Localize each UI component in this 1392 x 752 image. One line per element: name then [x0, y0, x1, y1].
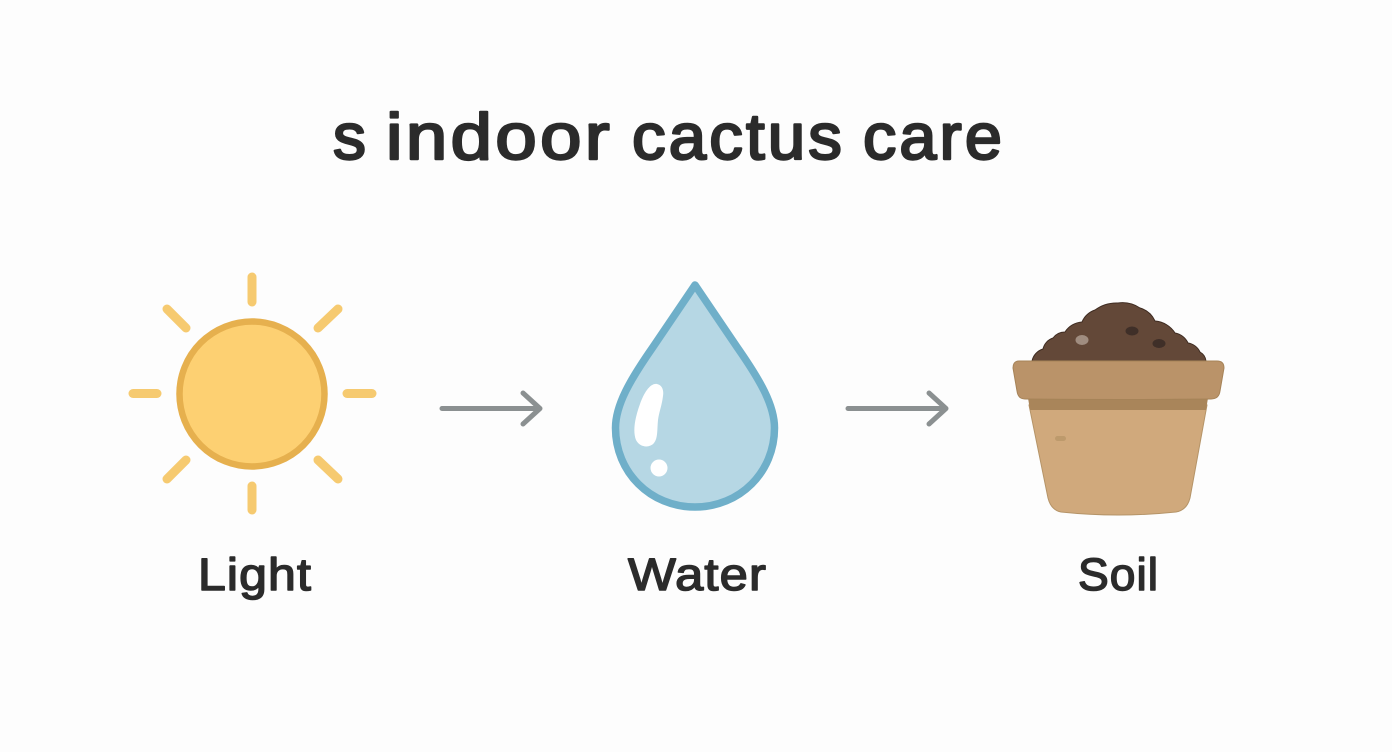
pot body — [1029, 405, 1207, 515]
arrow: water to soil — [848, 393, 946, 424]
label: Soil: Soil — [1078, 549, 1159, 600]
pot mark — [1055, 436, 1066, 441]
icon: soil pot — [1013, 303, 1224, 515]
sun rays — [133, 277, 372, 510]
label: Water: Water — [628, 549, 767, 600]
arrow: light to water — [442, 393, 540, 424]
drop highlight — [634, 384, 663, 446]
title: care — [863, 100, 1005, 173]
drop small highlight — [650, 460, 668, 476]
soil specks — [1076, 326, 1166, 348]
label: Light: Light — [198, 549, 312, 600]
title: indoor — [386, 100, 613, 173]
soil mound — [1032, 303, 1206, 361]
icon: water drop — [616, 285, 774, 507]
pot band — [1028, 398, 1208, 410]
pot rim — [1013, 361, 1224, 400]
title: s — [333, 100, 369, 173]
title: cactus — [632, 100, 845, 173]
drop body — [616, 285, 774, 507]
icon: sun — [133, 277, 372, 510]
sun disc — [180, 322, 324, 466]
